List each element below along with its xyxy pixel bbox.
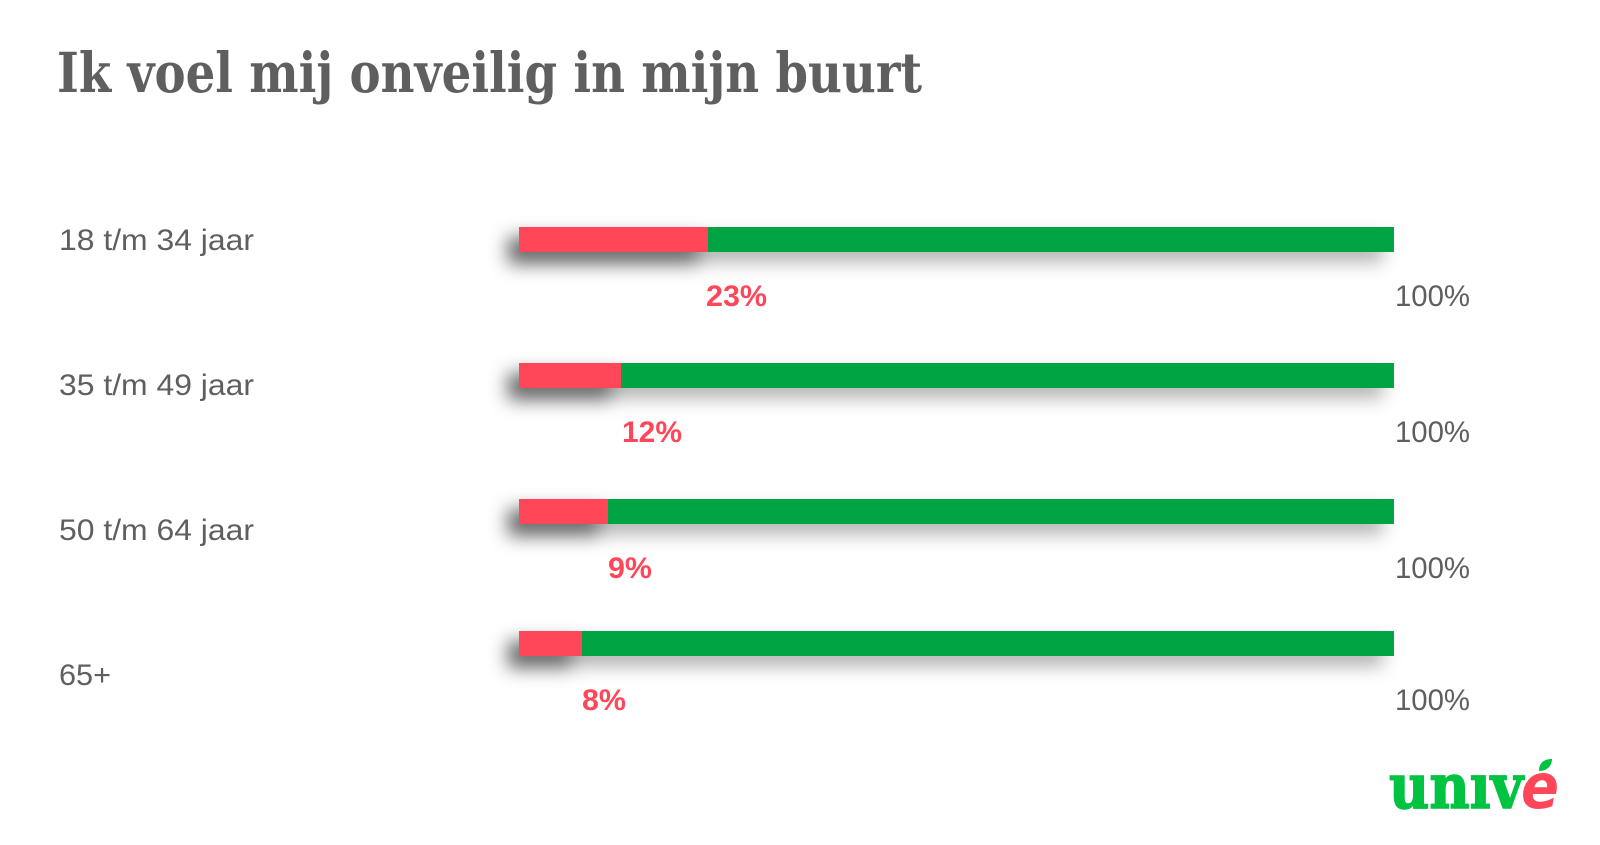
age label: 65+: 65+ bbox=[59, 659, 111, 692]
row: 65+ bbox=[59, 631, 1470, 717]
value: 9%: 9% bbox=[608, 552, 652, 585]
bar: total 100% bbox=[519, 227, 1394, 252]
value: 12%: 12% bbox=[622, 416, 682, 449]
bar: 23% segment bbox=[519, 227, 708, 252]
row: 18 t/m 34 jaar bbox=[59, 224, 1470, 313]
logo: univé: e bbox=[1521, 750, 1559, 823]
bar shadow bbox=[508, 641, 1383, 668]
value: 100%: 100% bbox=[1395, 684, 1470, 717]
bar: total 100% bbox=[519, 499, 1394, 524]
bar: total 100% bbox=[519, 631, 1394, 656]
age label: 18 t/m 34 jaar: 18 t/m 34 jaar bbox=[59, 224, 254, 257]
value: 23%: 23% bbox=[706, 280, 767, 313]
value: 100%: 100% bbox=[1395, 416, 1470, 449]
logo: univé: unıv bbox=[1389, 750, 1525, 823]
bar: total 100% bbox=[519, 363, 1394, 388]
value: 8%: 8% bbox=[582, 684, 626, 717]
age label: 50 t/m 64 jaar: 50 t/m 64 jaar bbox=[59, 514, 254, 547]
bar: 9% segment bbox=[519, 499, 608, 524]
value: 100%: 100% bbox=[1395, 280, 1470, 313]
icon: leaf bbox=[1539, 759, 1552, 771]
age label: 35 t/m 49 jaar: 35 t/m 49 jaar bbox=[59, 369, 254, 402]
row: 50 t/m 64 jaar bbox=[59, 499, 1470, 585]
bar: 12% segment bbox=[519, 363, 621, 388]
row: 35 t/m 49 jaar bbox=[59, 363, 1470, 449]
bar shadow bbox=[508, 373, 1383, 400]
bar: 8% segment bbox=[519, 631, 582, 656]
value: 100%: 100% bbox=[1395, 552, 1470, 585]
bar shadow bbox=[508, 509, 1383, 536]
bar shadow bbox=[508, 237, 1383, 264]
title: Ik voel mij onveilig in mijn buurt bbox=[57, 40, 922, 105]
